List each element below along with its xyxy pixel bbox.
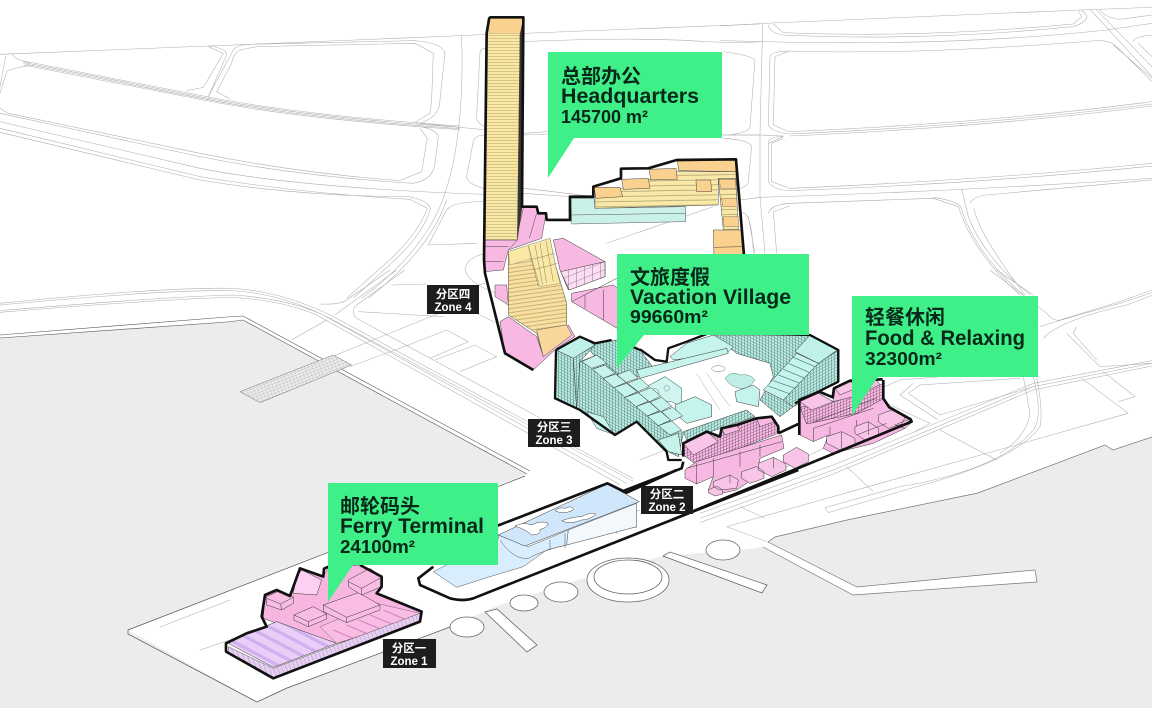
road network: west and jetty — [0, 270, 633, 485]
callout: ferry terminal: 24100m² — [340, 537, 415, 557]
pink podium — [485, 207, 546, 305]
pink cluster food and relaxing — [800, 380, 911, 453]
label: zone 3 — [528, 419, 580, 447]
pink boxes — [267, 568, 382, 627]
building: ferry terminal zone 1 — [226, 565, 422, 678]
road network: central and piers — [160, 440, 840, 652]
road network: around headquarters — [460, 24, 762, 323]
callout: headquarters — [548, 52, 722, 178]
label: zone 2: 分区二 — [650, 487, 684, 501]
callout: headquarters: 145700 m² — [561, 107, 648, 127]
callout: ferry terminal: 邮轮码头 — [340, 495, 420, 518]
zone 3 boundary — [555, 333, 838, 460]
label: zone 3: Zone 3 — [535, 435, 573, 447]
zone 4 boundary — [484, 17, 744, 370]
callout: ferry terminal — [328, 483, 498, 602]
label: zone 2 — [641, 486, 693, 514]
roof with skylights — [498, 484, 639, 546]
label: zone 2: Zone 2 — [648, 502, 686, 514]
callout: ferry terminal: Ferry Terminal — [340, 515, 484, 538]
east roof strip — [320, 603, 420, 643]
pink upper mass — [263, 565, 422, 643]
building: headquarters zone 4 — [484, 17, 744, 370]
zone 1 boundary — [226, 565, 422, 678]
callout: headquarters: Headquarters — [561, 85, 699, 108]
courtyard — [637, 335, 838, 453]
label: zone 1: 分区一 — [392, 641, 427, 655]
label: zone 1 — [383, 639, 436, 668]
label: zone 3: 分区三 — [537, 420, 571, 434]
stepped front facade — [555, 337, 683, 457]
label: zone 4: 分区四 — [436, 287, 470, 301]
east wing — [571, 159, 744, 255]
label: zone 4: Zone 4 — [434, 302, 472, 314]
callout: food and relaxing: 32300m² — [865, 349, 942, 369]
callout: food and relaxing — [852, 296, 1038, 415]
second tower — [500, 238, 575, 370]
zone 2 left boundary — [418, 470, 798, 600]
building: zone 2 canopy — [418, 470, 798, 600]
label: zone 1: Zone 1 — [390, 656, 428, 668]
water and shoreline — [0, 316, 1152, 708]
purple roof — [228, 622, 337, 667]
zone 2 and east boundary — [622, 379, 912, 520]
callout: vacation village: Vacation Village — [630, 286, 791, 309]
road network: northeast — [720, 7, 1152, 295]
jetty grid — [240, 355, 352, 403]
label: zone 4 — [427, 285, 479, 314]
callout: vacation village: 99660m² — [630, 307, 708, 327]
terminal facade — [228, 613, 420, 678]
building: vacation village zone 3 — [555, 333, 912, 520]
road network: upper left — [0, 34, 500, 298]
bridges — [637, 335, 755, 440]
road network: southeast — [700, 270, 1152, 542]
back facades — [580, 335, 838, 417]
glass hall — [433, 503, 637, 587]
callout: food and relaxing: 轻餐休闲 — [865, 306, 945, 329]
main tower — [485, 17, 523, 240]
callout: vacation village — [617, 254, 809, 368]
pink blocks — [553, 238, 620, 330]
callout: food and relaxing: Food & Relaxing — [865, 327, 1025, 350]
callout: headquarters: 总部办公 — [561, 65, 641, 88]
courtyard pavilions — [647, 377, 760, 423]
pink cluster zone 2 — [683, 417, 808, 496]
callout: vacation village: 文旅度假 — [630, 265, 710, 289]
